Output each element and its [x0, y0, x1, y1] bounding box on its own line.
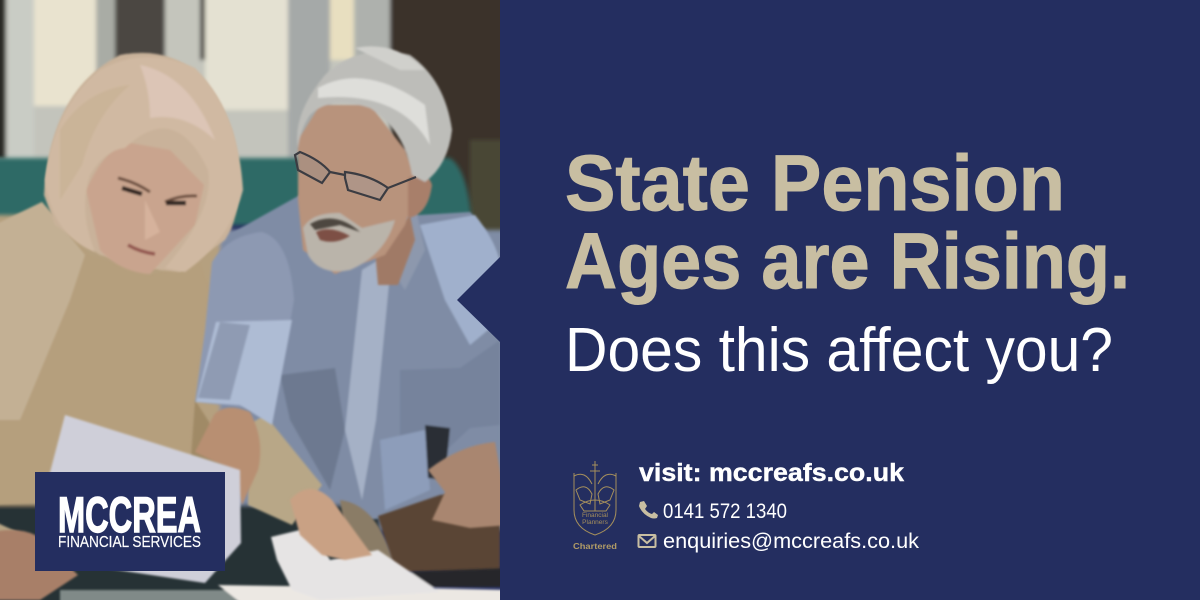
contact: phone number: 0141 572 1340: [663, 500, 787, 523]
photo: teal sofa: [0, 158, 472, 225]
title: State Pension: [565, 138, 1065, 227]
photo: man's neck: [375, 215, 415, 285]
contact: email: enquiries@mccreafs.co.uk: [663, 530, 920, 553]
photo: woman's hair back: [44, 53, 240, 272]
photo: woman's hair front: [45, 57, 243, 272]
badge: Chartered Financial Planners: [573, 461, 617, 551]
photo: woman's hand on paper: [290, 489, 372, 560]
photo: lower base tones: [0, 215, 520, 600]
photo: man's left hand: [428, 442, 510, 528]
icon: envelope: [638, 535, 656, 547]
photo: man's trousers: [378, 488, 500, 572]
badge inner text: Financial: [582, 512, 609, 519]
photo: man's rolled sleeve: [195, 232, 294, 425]
photo: woman's jumper: [0, 202, 322, 548]
logo wordmark: MCCREA: [58, 487, 201, 543]
photo: woman's lower hand: [0, 530, 78, 600]
icon: phone: [639, 501, 658, 518]
photo: man's head: [297, 46, 452, 274]
logo strapline: FINANCIAL SERVICES: [58, 534, 201, 551]
badge Chartered label: Chartered: [573, 541, 617, 551]
badge inner text: [582, 512, 609, 526]
photo: man's mouth and moustache: [310, 219, 360, 242]
badge crest: [574, 461, 616, 535]
navy panel with pointer: [457, 0, 1200, 600]
logo: McCrea Financial Services: [35, 472, 225, 571]
title: [565, 138, 1130, 305]
title: Ages are Rising.: [565, 216, 1130, 305]
photo: couple reviewing paperwork: [0, 0, 520, 600]
contact: website: visit: mccreafs.co.uk: [639, 459, 904, 487]
subtitle: Does this affect you?: [565, 316, 1113, 385]
photo: man's pointing hand: [195, 408, 260, 505]
photo: man's shirt: [215, 195, 500, 520]
photo: man's glasses: [295, 152, 416, 200]
photo background: window and room: [0, 0, 500, 232]
photo: table and papers: [48, 415, 520, 600]
photo: woman's thigh: [339, 499, 393, 560]
badge inner text: Planners: [582, 519, 609, 526]
photo: woman's face: [86, 142, 204, 274]
